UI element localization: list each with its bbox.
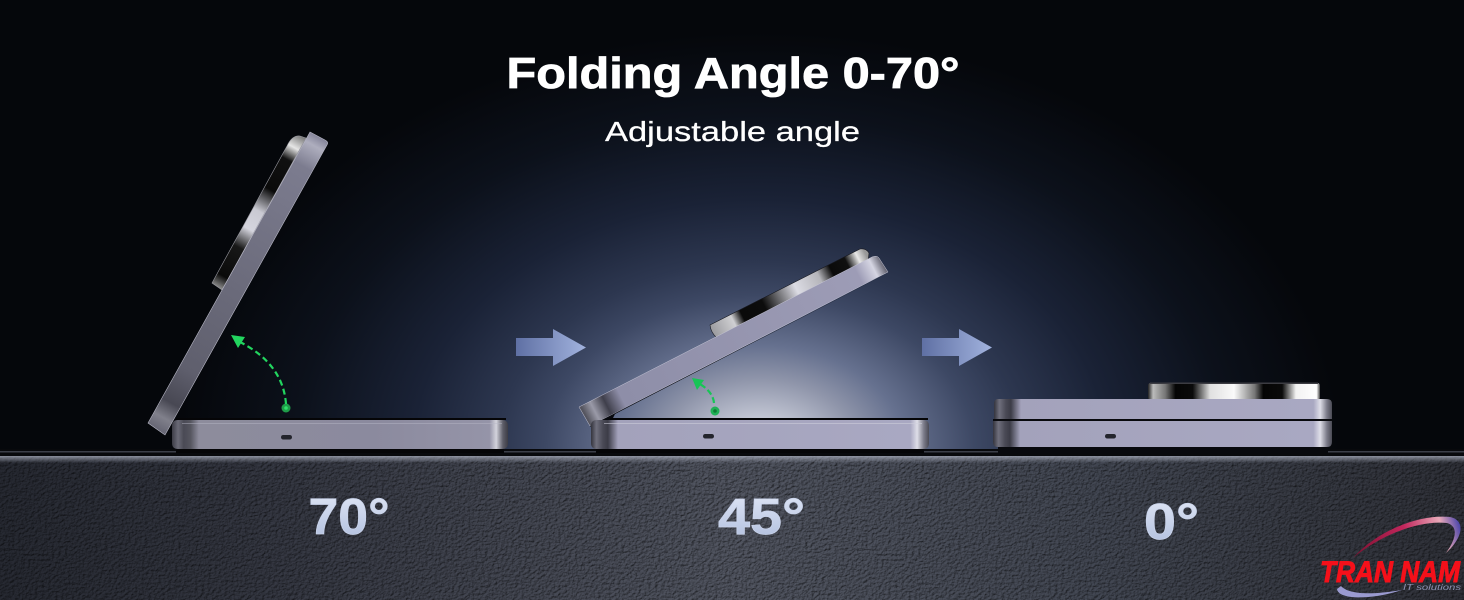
floor surface: [0, 449, 1464, 600]
top panel 45: [579, 256, 888, 426]
label 0 degrees: 0°: [1144, 493, 1199, 550]
hinge 45: [590, 273, 888, 430]
base 0: [993, 421, 1332, 447]
magnetic ring 0: [1148, 382, 1320, 400]
logo tagline: IT solutions: [1403, 583, 1461, 592]
step arrow 2: [922, 329, 992, 366]
title: Folding Angle 0-70°: [506, 49, 960, 98]
device at 45 degrees: [579, 249, 929, 453]
watermark logo: [1320, 517, 1461, 597]
label 70 degrees: 70°: [308, 488, 390, 545]
logo arc: [1353, 517, 1461, 558]
label 45 degrees: 45°: [718, 488, 805, 545]
base 70: [172, 420, 508, 449]
top panel 70: [148, 132, 328, 435]
device at 0 degrees: [993, 382, 1332, 453]
magnetic ring 45: [710, 249, 869, 338]
base 45: [591, 420, 929, 449]
subtitle: Adjustable angle: [605, 116, 860, 147]
background glow: [0, 0, 1464, 456]
green angle arrow 45: [692, 378, 720, 416]
step arrow 1: [516, 329, 586, 366]
green angle arrow 70: [231, 335, 290, 412]
top panel 0: [994, 399, 1332, 419]
device at 70 degrees: [148, 132, 508, 453]
magnetic ring 70: [212, 136, 306, 290]
